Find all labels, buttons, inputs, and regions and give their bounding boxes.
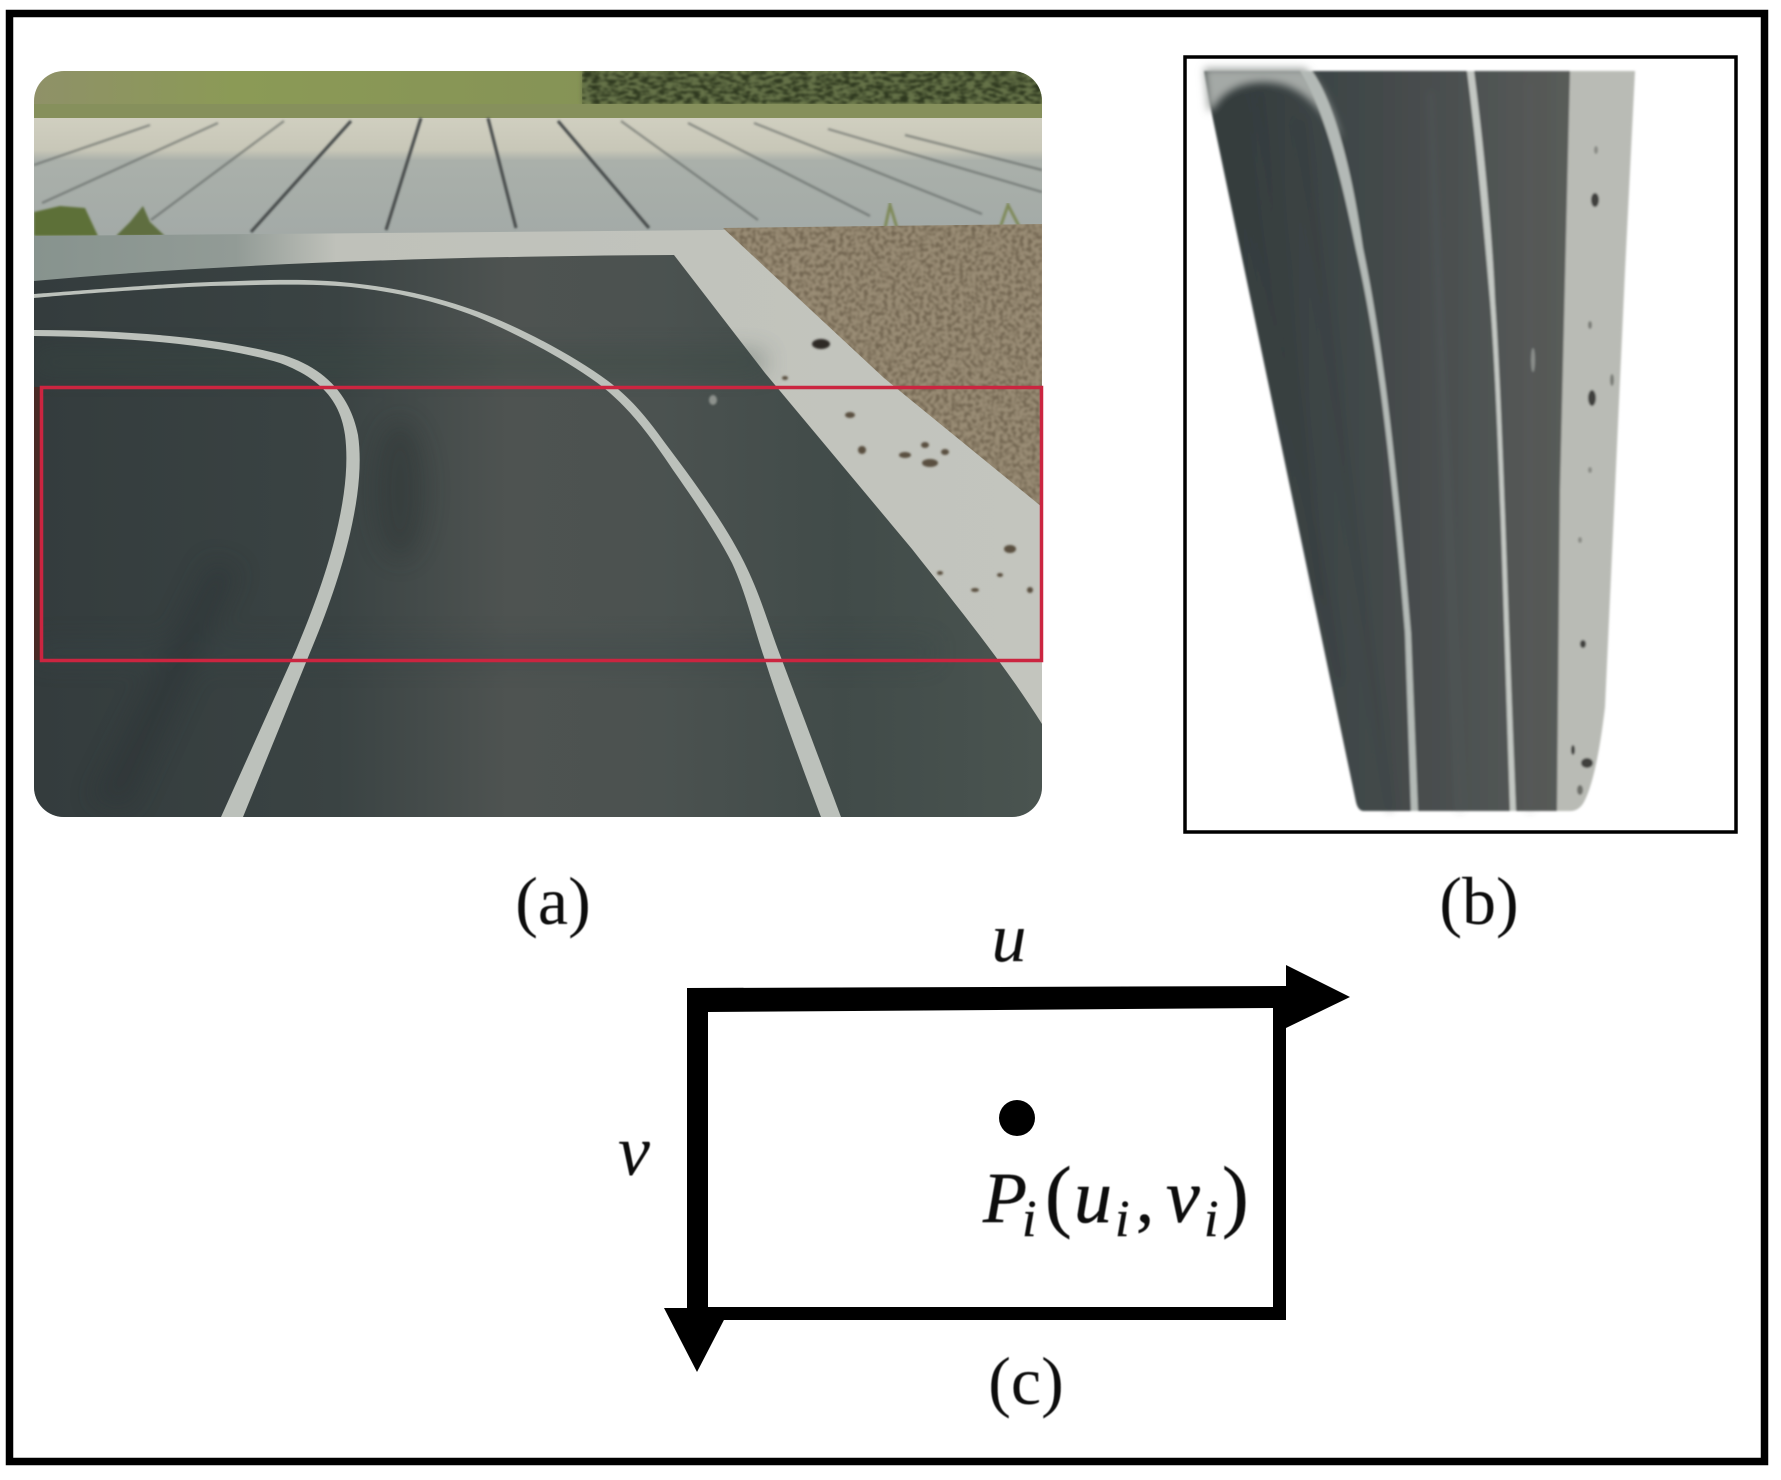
panel c: image coordinate diagram [618,900,1350,1372]
label Pi(ui, vi): i [1115,1191,1129,1248]
arrow: u axis [1286,965,1350,1028]
label Pi(ui, vi): ( [1045,1152,1072,1240]
vertical smear streaks [1235,80,1530,811]
lane line right [1467,71,1516,811]
panel a: road photograph with red region of interest [34,71,1042,817]
concrete surround [34,228,1042,817]
caption (c): (c) [988,1343,1064,1419]
painted lane line: outer curve [34,280,841,817]
label Pi(ui, vi): , [1136,1158,1154,1238]
gravel bed [723,224,1042,507]
point P [999,1100,1035,1136]
asphalt road surface [34,255,1042,817]
photo: road scene [34,71,1042,817]
panel b: bird's-eye view [1185,57,1736,832]
arrow: v axis [664,1308,726,1372]
label Pi(ui, vi): u [1074,1155,1112,1239]
label Pi(ui, vi): ) [1222,1152,1249,1240]
label Pi(ui, vi): v [1166,1155,1200,1239]
label Pi(ui, vi): i [1022,1191,1036,1248]
label Pi(ui, vi): i [1204,1191,1218,1248]
grass strip [34,71,1042,121]
left edge tint inside red box [34,387,40,660]
label v: v [618,1111,650,1191]
concrete spots [1531,146,1614,795]
panel b frame [1185,57,1736,832]
faded corner [1204,68,1342,140]
lane line left [1300,71,1418,811]
warped road [1204,68,1635,811]
warped asphalt [1204,71,1570,811]
road staining [384,340,773,546]
caption (a): (a) [515,863,591,939]
grass tufts [34,205,1020,236]
label u: u [992,900,1026,977]
concrete strip [1552,71,1635,811]
painted lane line: inner curve [34,330,360,817]
label Pi(ui, vi): P [982,1158,1027,1238]
red region box [42,388,1042,660]
caption (b): (b) [1439,863,1519,939]
debris on concrete [709,339,1033,593]
paving slabs [34,118,1042,236]
image rectangle outline [687,986,1286,1320]
